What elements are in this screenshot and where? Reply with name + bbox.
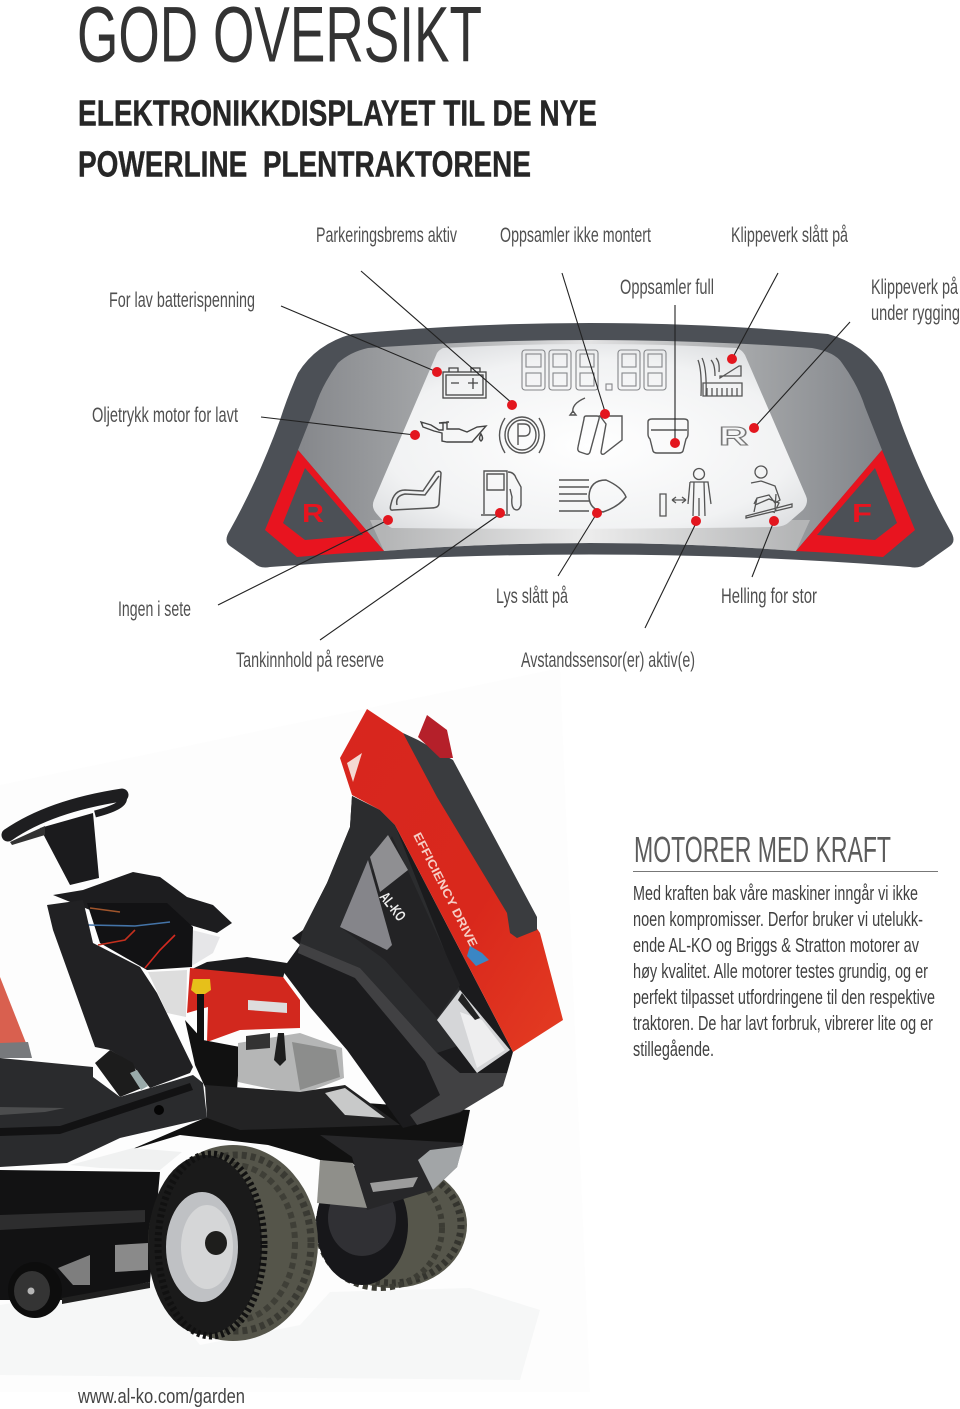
lower band highlight [370, 520, 810, 551]
electronics cavity [87, 903, 193, 970]
photo background [0, 668, 590, 1392]
icon: oil can [421, 422, 486, 442]
engine red shroud [187, 968, 300, 1042]
steering wheel [8, 795, 123, 885]
hood mesh [340, 835, 460, 1018]
under-frame [130, 1100, 470, 1165]
display labels: Oljetrykk motor for lavt [92, 404, 238, 427]
red marker dots [383, 354, 779, 526]
right red triangle [796, 450, 915, 557]
heading rule [633, 870, 938, 872]
icon: fuel pump [481, 471, 521, 515]
display labels: Oppsamler ikke montert [500, 224, 651, 247]
white bag [190, 930, 220, 967]
icon: battery [443, 368, 486, 398]
body text: stillegående. [633, 1039, 714, 1061]
pale tank [148, 970, 187, 1017]
engine lower [205, 1085, 400, 1130]
icon: parking brake [500, 417, 544, 453]
icon: headlight [559, 480, 626, 512]
right red triangle: F [852, 498, 872, 528]
display housing [226, 323, 954, 568]
hood lettering: EFFICIENCY DRIVE [410, 830, 480, 950]
callout lines [218, 271, 850, 640]
LCD panel [373, 344, 807, 529]
wiring [88, 908, 175, 968]
display labels: Parkeringsbrems aktiv [316, 224, 457, 247]
rear fender [47, 900, 193, 1088]
platform [0, 1058, 207, 1167]
engine silver [238, 1033, 344, 1095]
icon: distance sensor person [660, 468, 711, 516]
body text [633, 883, 935, 1061]
seat hump [53, 872, 232, 933]
hood upper shell [300, 796, 475, 1053]
front rim [166, 1192, 238, 1302]
oil cap [191, 979, 211, 1047]
hood lower rim [298, 943, 507, 1125]
display labels: Ingen i sete [118, 598, 191, 621]
seven-segment readout [522, 350, 666, 390]
blue badge [467, 946, 489, 966]
subtitle [78, 92, 597, 184]
ground gap [70, 1148, 182, 1170]
seat mount [95, 1050, 148, 1097]
rear tire [316, 1162, 467, 1288]
display labels: Lys slått på [496, 585, 568, 608]
icon: grass catcher full [648, 419, 688, 453]
icon: cutting deck [698, 358, 742, 396]
panel: tractor photo [0, 668, 590, 1392]
deck wheel [8, 1262, 62, 1318]
hood logo: AL-KO [376, 889, 409, 925]
website footer: www.al-ko.com/garden [77, 1386, 245, 1408]
subtitle: ELEKTRONIKKDISPLAYET TIL DE NYE [78, 92, 597, 134]
display labels: Helling for stor [721, 585, 817, 608]
hood highlight [347, 753, 362, 782]
display labels [92, 224, 960, 672]
engine top [190, 957, 287, 978]
icon: tilt warning [746, 466, 792, 518]
display labels: Klippeverk slått på [731, 224, 848, 247]
far-left red body [0, 977, 32, 1058]
silver band [298, 340, 882, 551]
icon: reverse R: R [719, 421, 748, 451]
mower deck [0, 1170, 160, 1304]
hood black body [282, 796, 513, 1128]
bumper [320, 1135, 463, 1210]
hood grey cap [403, 733, 537, 938]
panel: instrument display [226, 323, 954, 568]
display labels: Oppsamler full [620, 276, 714, 299]
headlight [437, 990, 510, 1073]
black engine side [185, 1020, 240, 1090]
left red triangle [265, 450, 384, 557]
shroud label [248, 1000, 287, 1013]
icon: seat [390, 471, 441, 510]
front tire [148, 1145, 318, 1341]
display labels: For lav batterispenning [109, 289, 255, 312]
display labels: Avstandssensor(er) aktiv(e) [521, 649, 695, 672]
grey block [317, 1160, 367, 1208]
left red triangle: R [302, 498, 324, 528]
ground reflection [0, 1280, 540, 1380]
display labels: Tankinnhold på reserve [236, 649, 384, 672]
hood red panel [340, 709, 563, 1052]
icon: grass catcher not fitted [570, 398, 622, 454]
subtitle: POWERLINE PLENTRAKTORENE [78, 144, 531, 184]
red handle [418, 715, 453, 758]
